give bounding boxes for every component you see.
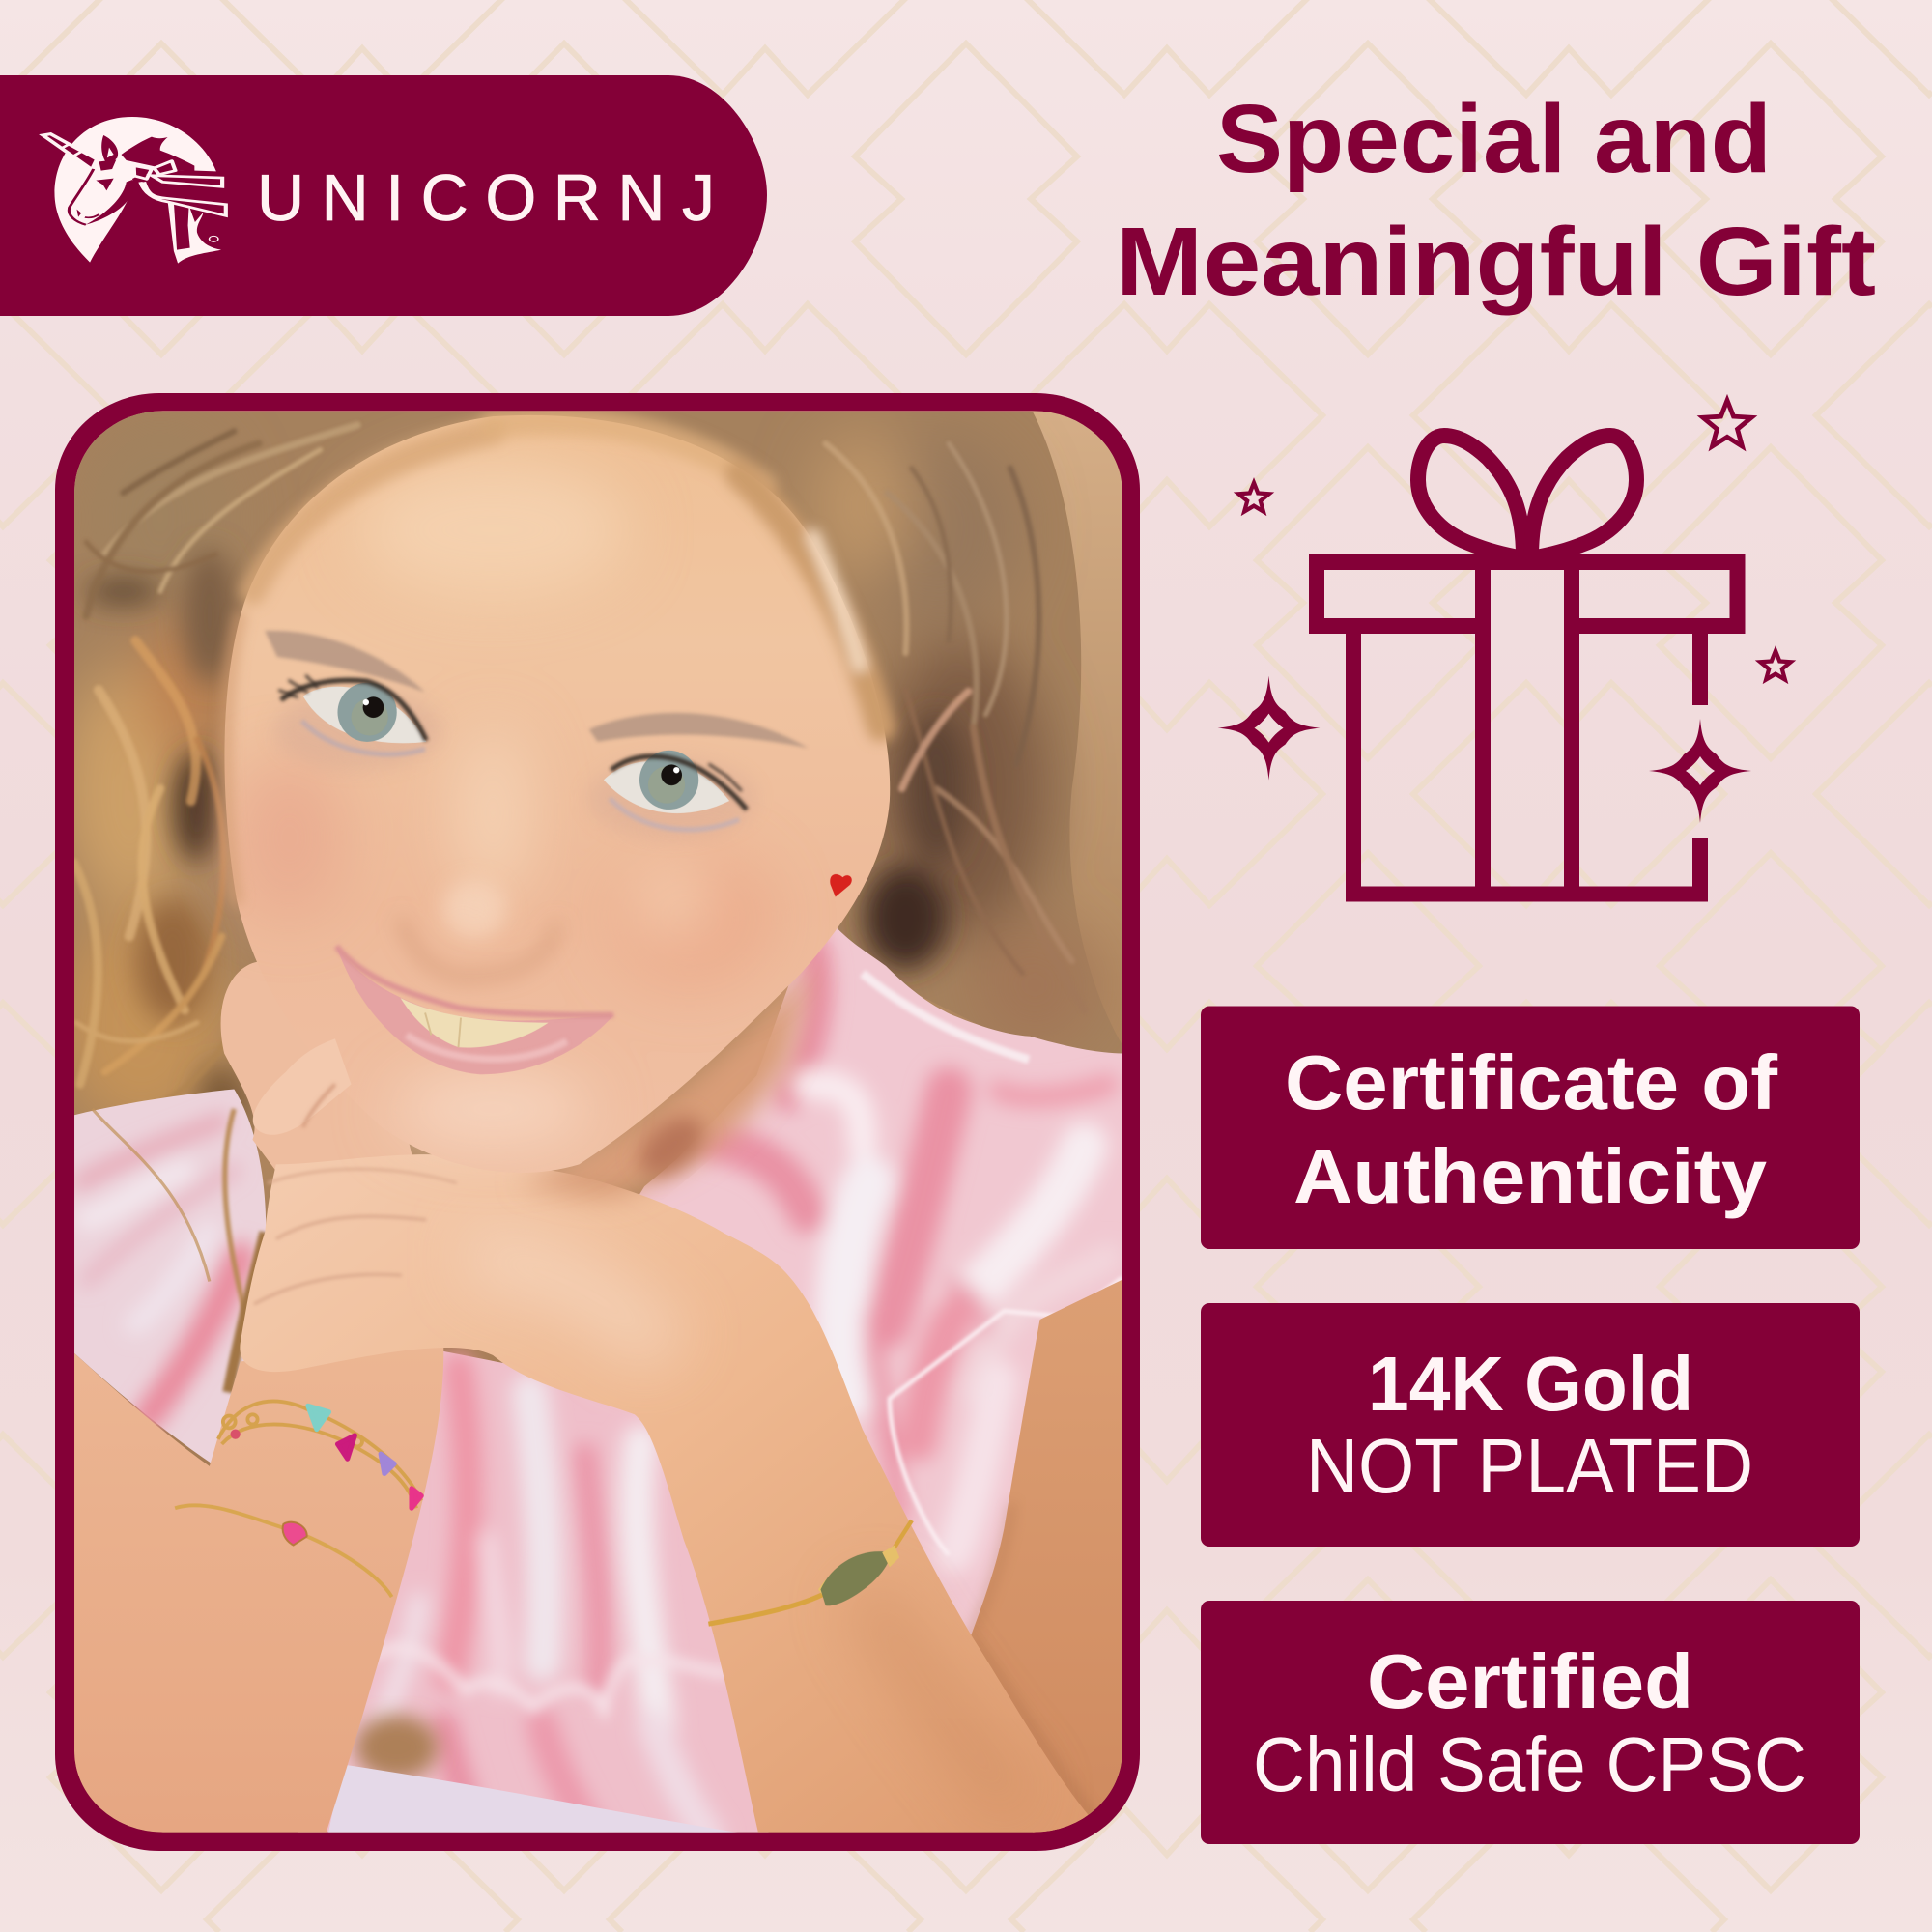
badge: certificate of authenticity: Authenticity	[1293, 1133, 1768, 1219]
dress: torso	[296, 1337, 770, 1838]
finger under chin	[253, 1038, 352, 1135]
sparkle: right	[1649, 719, 1751, 823]
earring	[830, 874, 852, 897]
bracelet: gold id plate	[708, 1594, 823, 1624]
badge: certificate of authenticity: Certificate of	[1285, 1039, 1777, 1125]
star: top right	[1703, 400, 1751, 446]
brow: right	[589, 713, 809, 748]
badge: certified child safe cpsc: Certified	[1367, 1638, 1693, 1724]
table edge	[328, 1765, 737, 1833]
eye: right	[587, 751, 755, 838]
badge: 14k gold not plated: NOT PLATED	[1306, 1423, 1753, 1509]
dress: collar and hem	[863, 974, 1029, 1060]
photo content	[55, 411, 1123, 1838]
dress: right panel and sleeve	[639, 928, 1122, 1634]
mouth	[336, 947, 613, 1074]
face	[224, 415, 890, 1173]
badge: 14k gold not plated	[1201, 1303, 1860, 1547]
logo band	[0, 75, 767, 316]
hairline and bangs	[226, 421, 881, 899]
skin: left forearm	[74, 1343, 443, 1835]
title: Special and	[1216, 85, 1772, 193]
skin: right arm	[972, 1279, 1122, 1833]
nose	[401, 880, 557, 977]
icon: gift box with stars	[1217, 400, 1791, 895]
photo frame	[55, 393, 1140, 1851]
photo panel: girl wearing gold bracelets	[55, 393, 1140, 1851]
badge: certificate of authenticity	[1201, 1007, 1860, 1249]
badge: 14k gold not plated: 14K Gold	[1368, 1341, 1693, 1427]
dress: left sleeve	[74, 1090, 266, 1466]
bracelet: pink heart	[175, 1505, 392, 1597]
band shape	[0, 75, 767, 316]
star: left	[1238, 483, 1269, 512]
dress: ruffle	[370, 1648, 729, 1710]
hair mass	[74, 412, 1122, 1053]
brow: left	[265, 631, 425, 693]
gift box	[1317, 436, 1737, 895]
brand name: UNICORNJ	[257, 161, 715, 235]
chin-side hand	[220, 962, 412, 1169]
hair strands	[74, 425, 1084, 1115]
neck shadow	[518, 961, 813, 1198]
eye: left	[273, 675, 441, 769]
icon: unicorn logo	[43, 117, 226, 264]
bracelet: heart charms	[218, 1402, 421, 1508]
hair shadow under arm	[355, 1715, 439, 1779]
star: right	[1760, 651, 1791, 680]
skin: hand and forearm	[240, 1154, 1106, 1835]
badge: certified child safe cpsc	[1201, 1601, 1860, 1844]
sparkle: left	[1217, 676, 1320, 781]
title	[1116, 85, 1876, 316]
title: Meaningful Gift	[1116, 208, 1876, 316]
badge: certified child safe cpsc: Child Safe CPSC	[1253, 1721, 1806, 1807]
